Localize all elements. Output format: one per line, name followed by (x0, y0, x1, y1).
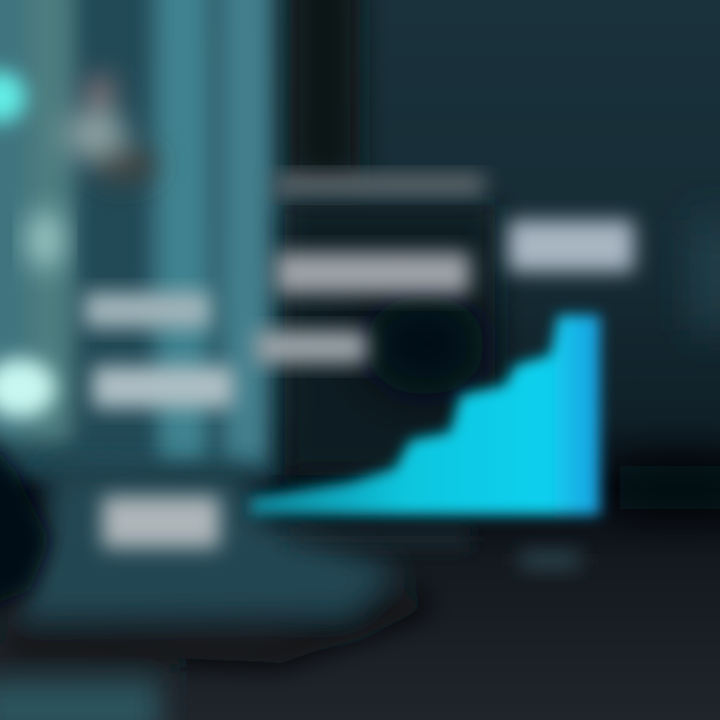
panel: right dark wall (620, 220, 720, 510)
text block: blurred label 1 (275, 174, 485, 196)
text block: blurred label 4 (84, 292, 210, 328)
bar chart: rising cyan bars (250, 315, 600, 515)
dark patch behind chart (365, 295, 485, 395)
text block: blurred label 3 (255, 330, 367, 364)
text block: blurred label 6 (102, 496, 220, 548)
dark shape lower left (0, 430, 50, 610)
panel: laptop (0, 465, 430, 720)
icon: white glow (0, 358, 56, 418)
icon: pale glow (27, 210, 63, 270)
panel: left teal wall (0, 0, 280, 480)
figure: person silhouette (63, 76, 157, 181)
text block: blurred label 5 (92, 366, 234, 408)
icon: glowing cyan circle (0, 71, 26, 123)
panel: dark column (285, 0, 495, 475)
text block: blurred label 2 (275, 252, 470, 294)
text block: faint axis labels (290, 532, 580, 568)
text block: blurred callout (508, 220, 634, 272)
